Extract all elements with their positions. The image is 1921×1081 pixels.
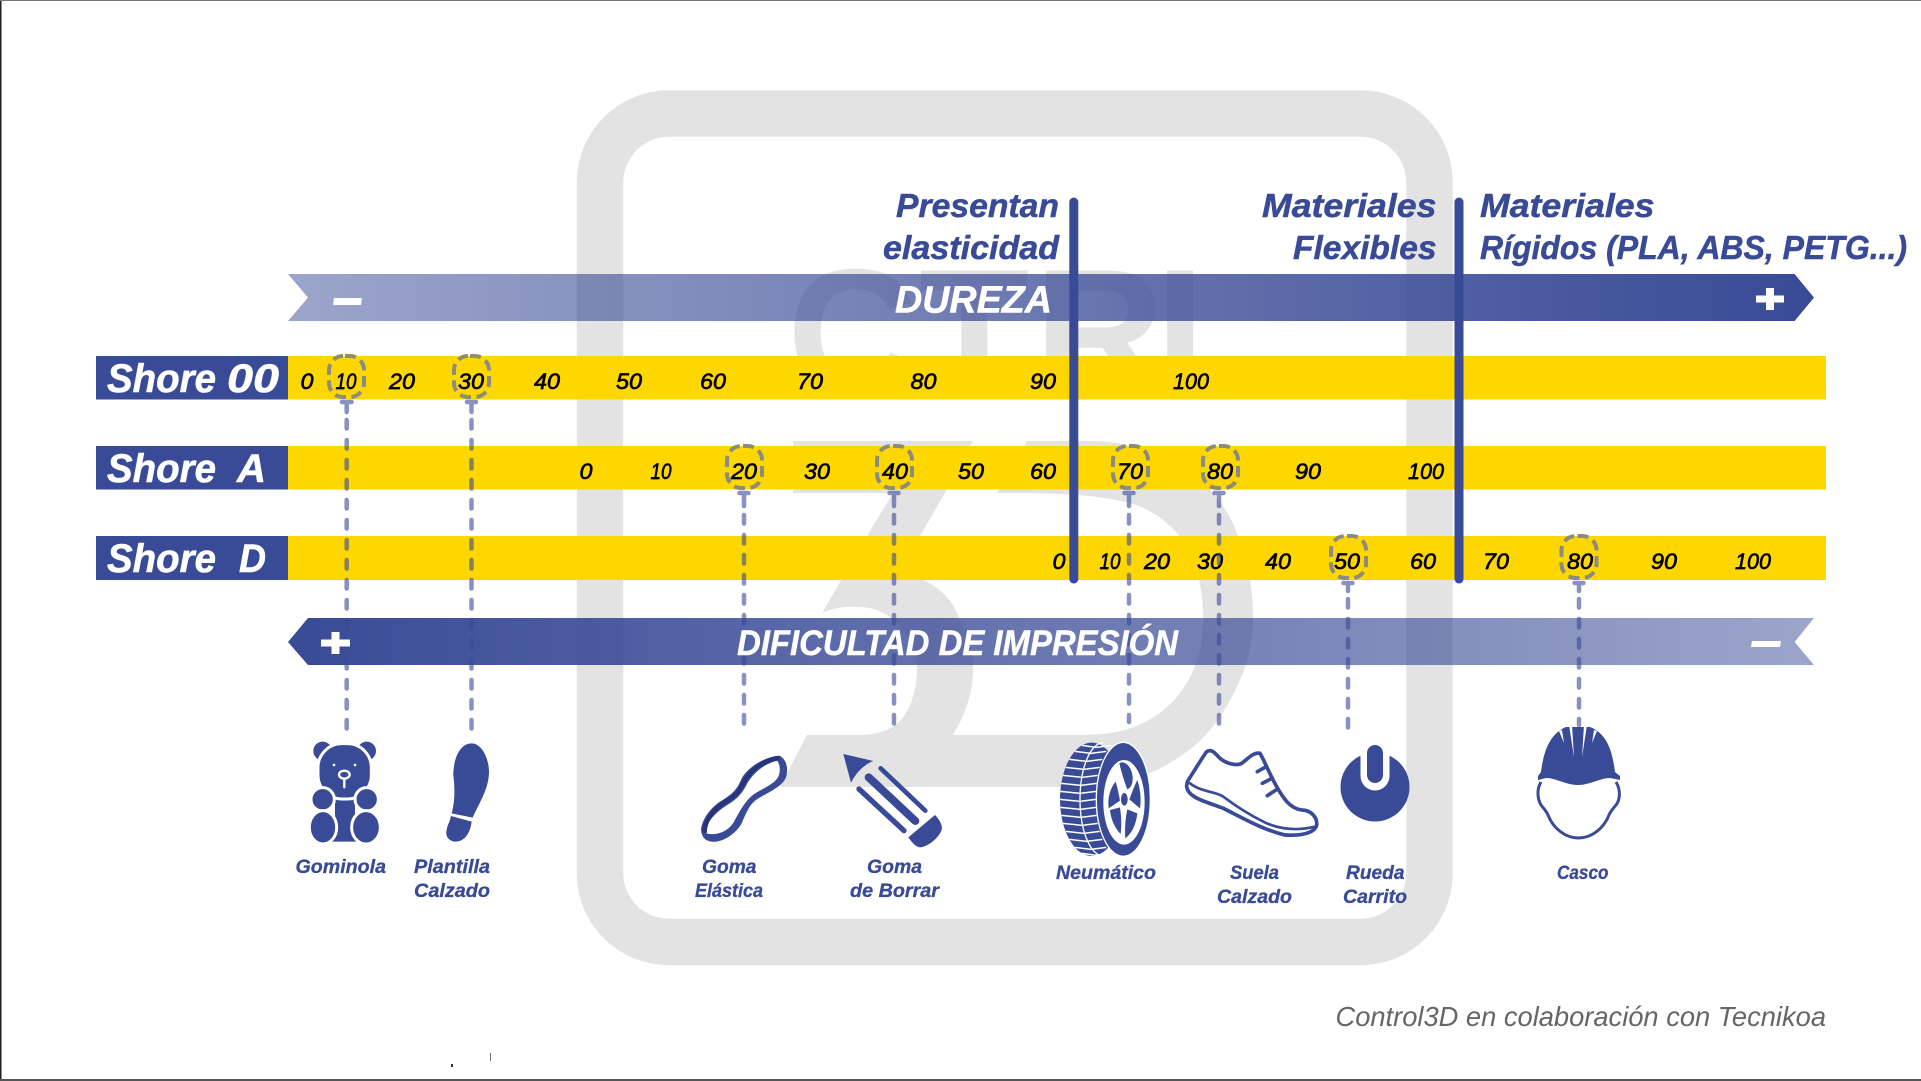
Shore A values: 100 <box>1408 459 1445 484</box>
icon: pencil eraser <box>843 754 942 847</box>
Shore A values: 10 <box>650 459 672 484</box>
Shore 00 values: 10 <box>336 369 357 394</box>
Shore D values: 90 <box>1651 549 1678 574</box>
scale: Shore A <box>96 446 1826 491</box>
ribbon: dificultad arrow <box>288 618 1814 665</box>
heading: materiales flexibles <box>1262 187 1436 266</box>
Shore D values: 30 <box>1197 549 1224 574</box>
Shore D values: 60 <box>1410 549 1437 574</box>
label: Suela Calzado <box>1217 863 1292 908</box>
icon: plus on dureza ribbon <box>1756 288 1784 310</box>
Shore 00 label <box>107 357 279 401</box>
label: Casco: Casco <box>1557 863 1608 884</box>
Shore 00 values <box>300 369 1210 394</box>
Shore 00 label: Shore <box>107 357 216 401</box>
Shore A values: 20 <box>730 459 758 484</box>
Shore A label: A <box>236 447 266 491</box>
watermark rounded frame <box>600 114 1430 942</box>
label: Rueda Carrito: Rueda <box>1346 863 1405 884</box>
Shore 00 values: 70 <box>797 369 824 394</box>
vertical divider: elastic threshold <box>1069 202 1078 579</box>
icon: minus on dificultad ribbon <box>1751 641 1781 647</box>
Shore A label box <box>96 446 288 490</box>
label: Suela Calzado: Suela <box>1230 863 1279 884</box>
Shore D values: 80 <box>1567 549 1594 574</box>
label: Gominola: Gominola <box>296 857 386 878</box>
icon: gummy bear <box>309 742 380 844</box>
label: Goma de Borrar: de Borrar <box>850 881 941 902</box>
icon: helmet with face <box>1538 725 1620 838</box>
icon: minus on dureza ribbon <box>333 298 362 305</box>
Shore D values: 50 <box>1334 549 1361 574</box>
Shore 00 values: 30 <box>458 369 485 394</box>
icon: rubber band <box>701 756 787 842</box>
Shore 00 values: 0 <box>300 369 314 394</box>
Shore D values: 70 <box>1483 549 1510 574</box>
label: Plantilla Calzado <box>414 857 490 902</box>
Shore D yellow bar <box>288 536 1826 580</box>
Shore A values: 40 <box>882 459 909 484</box>
watermark word CTRL: CTRL <box>787 232 1266 434</box>
Shore A values: 70 <box>1117 459 1144 484</box>
heading: materiales rigidos: Rígidos (PLA, ABS, PETG...) <box>1480 229 1907 266</box>
Shore A values: 0 <box>580 459 593 484</box>
Shore 00 values: 20 <box>388 369 416 394</box>
Shore D values: 0 <box>1052 549 1066 574</box>
scale: Shore 00 <box>96 356 1826 401</box>
heading: presentan elasticidad: Presentan <box>896 187 1059 224</box>
Shore D values: 20 <box>1143 549 1171 574</box>
Shore A values: 50 <box>958 459 985 484</box>
label: Goma de Borrar: Goma <box>867 857 922 878</box>
Shore D values: 40 <box>1265 549 1292 574</box>
Shore D label: Shore <box>107 537 216 581</box>
label: Neumatico: Neumático <box>1056 863 1156 884</box>
Shore D label box <box>96 536 288 580</box>
label: Rueda Carrito: Carrito <box>1343 887 1407 908</box>
heading: materiales flexibles: Materiales <box>1262 187 1436 224</box>
Shore 00 yellow bar <box>288 356 1826 400</box>
Shore A values <box>580 459 1445 484</box>
label: Goma Elastica: Elástica <box>695 881 763 902</box>
Shore 00 values: 50 <box>616 369 643 394</box>
label: Rueda Carrito <box>1343 863 1407 908</box>
Shore A values: 90 <box>1295 459 1322 484</box>
label: Goma de Borrar <box>850 857 941 902</box>
Shore A values: 30 <box>804 459 831 484</box>
heading: presentan elasticidad <box>883 187 1060 266</box>
icon: plus on dificultad ribbon <box>321 632 350 654</box>
Shore 00 values: 60 <box>700 369 727 394</box>
label: Plantilla Calzado: Plantilla <box>414 857 490 878</box>
icon: sneaker <box>1187 751 1317 835</box>
Shore D label: D <box>239 537 266 581</box>
Shore A yellow bar <box>288 446 1826 490</box>
icon: tyre <box>1060 742 1150 856</box>
Shore 00 values: 80 <box>910 369 937 394</box>
Shore 00 values: 100 <box>1173 369 1210 394</box>
label: Suela Calzado: Calzado <box>1217 887 1292 908</box>
Shore A values: 60 <box>1030 459 1057 484</box>
Shore D values: 100 <box>1735 549 1772 574</box>
dashed highlights around selected values <box>329 356 1596 578</box>
Shore D values <box>1052 549 1772 574</box>
heading: materiales rigidos: Materiales <box>1480 187 1654 224</box>
heading: materiales rigidos <box>1480 187 1907 266</box>
Shore A values: 80 <box>1207 459 1234 484</box>
ribbon label: dificultad de impresion: DIFICULTAD DE IMPRESIÓN <box>737 623 1179 663</box>
ribbon: dureza arrow <box>288 274 1814 321</box>
Shore 00 label box <box>96 356 288 400</box>
Shore 00 values: 40 <box>534 369 561 394</box>
credit line: Control3D en colaboración con Tecnikoa <box>1336 1001 1826 1032</box>
Shore A label: Shore <box>107 447 216 491</box>
watermark: Control3D logo <box>600 114 1430 942</box>
heading: materiales flexibles: Flexibles <box>1293 229 1436 266</box>
icon: shoe insole footprint <box>446 743 489 842</box>
label: Plantilla Calzado: Calzado <box>414 881 490 902</box>
heading: presentan elasticidad: elasticidad <box>883 229 1060 266</box>
scale: Shore D <box>96 536 1826 581</box>
Shore 00 label: 00 <box>227 357 279 401</box>
label: Goma Elastica: Goma <box>702 857 757 878</box>
Shore D values: 10 <box>1100 549 1121 574</box>
icon: cart wheel power button <box>1340 745 1410 822</box>
Shore 00 values: 90 <box>1030 369 1057 394</box>
label: Goma Elastica <box>695 857 763 902</box>
ribbon label: dureza: DUREZA <box>895 280 1052 322</box>
vertical divider: flexible / rigid threshold <box>1454 202 1464 579</box>
connector lines from values to example objects <box>342 402 1584 732</box>
watermark 3D mark <box>780 441 1253 787</box>
